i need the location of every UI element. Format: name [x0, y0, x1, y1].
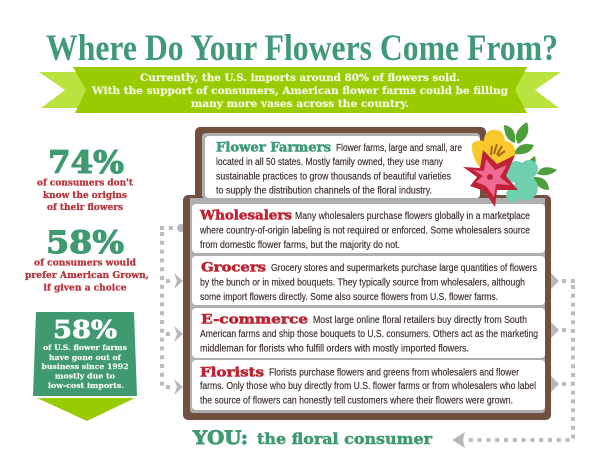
wholesalers text: where country-of-origin labeling is not required or enforced. Some wholesalers source: [199, 226, 530, 236]
panel: wholesalers: [190, 198, 545, 253]
flower farmers heading: Flower Farmers: [216, 140, 331, 156]
callout: 58 percent of farms gone: of U.S. flower farms: [43, 343, 128, 352]
florists text: Florists purchase flowers and greens from wholesalers and flower: [269, 368, 520, 378]
callout: 58 percent of farms gone: [33, 312, 137, 421]
stat: 58 percent would prefer American Grown: if given a choice: [44, 282, 126, 294]
grocers text: some import flowers directly. Some also source flowers from U.S. flower farms.: [200, 292, 498, 303]
florists text: [200, 368, 536, 406]
banner text: many more vases across the country.: [191, 99, 409, 110]
e-commerce text: American farms and ship those bouquets to U.S. consumers. Others act as the marketing: [200, 329, 538, 340]
yellow flower: [472, 130, 515, 168]
flower farmers text: sustainable practices to grow thousands of beautiful varieties: [216, 172, 451, 182]
icon: flower bouquet: [463, 122, 557, 207]
panel: e-commerce: [192, 308, 545, 358]
grocers heading: Grocers: [201, 260, 266, 276]
red lily: [463, 150, 518, 207]
grocers text: by the bunch or in mixed bouquets. They typically source from wholesalers, although: [200, 278, 525, 288]
wholesalers text: [199, 211, 530, 251]
stat: 74 percent: 74%: [48, 145, 124, 181]
left dotted connector with arrows: [160, 224, 185, 395]
stat: 74 percent: of consumers don't: [37, 178, 134, 188]
teal flower: [505, 160, 538, 202]
e-commerce text: Most large online floral retailers buy directly from South: [313, 315, 527, 326]
banner text: Currently, the U.S. imports around 80% of flowers sold.: [140, 73, 460, 84]
stat: 58 percent would prefer American Grown: 58%: [46, 225, 124, 261]
grocers text: Grocery stores and supermarkets purchase large quantities of flowers: [271, 263, 537, 274]
banner text: [91, 73, 508, 110]
florists heading: Florists: [200, 366, 264, 380]
stat: 58 percent would prefer American Grown: of consumers would: [34, 258, 136, 268]
wholesalers text: Many wholesalers purchase flowers globally in a marketplace: [295, 211, 530, 222]
stat: 74 percent: [37, 145, 134, 213]
callout: 58 percent of farms gone: mostly due to: [55, 372, 115, 380]
florists text: farms. Only those who buy directly from U.S. flower farms or from wholesalers who label: [200, 381, 536, 392]
flower farmers text: [216, 143, 462, 196]
you: the floral consumer: the floral consumer: [257, 430, 433, 448]
grocers text: [200, 263, 537, 303]
stat: 58 percent would prefer American Grown: [25, 225, 149, 294]
e-commerce heading: E-commerce: [201, 312, 308, 328]
banner ribbon: [39, 67, 561, 113]
wholesalers text: from domestic flower farms, but the majority do not.: [200, 240, 400, 251]
stat: 74 percent: of their flowers: [47, 202, 123, 213]
panel: florists: [192, 360, 545, 410]
banner text: With the support of consumers, American flower farms could be filling: [91, 86, 508, 97]
callout: 58 percent of farms gone: business since 1992: [42, 362, 128, 371]
e-commerce text: middleman for florists who fulfill orders with mostly imported flowers.: [200, 344, 469, 354]
panel: supply chain frame: [183, 195, 551, 420]
flower farmers text: Flower farms, large and small, are: [336, 143, 462, 154]
wholesalers heading: Wholesalers: [199, 208, 292, 224]
you: the floral consumer: [192, 427, 433, 449]
panel: grocers: [192, 256, 545, 305]
flower farmers text: located in all 50 states. Mostly family owned, they use many: [216, 157, 443, 168]
callout: 58 percent of farms gone: low-cost imports.: [48, 381, 124, 390]
stat: 74 percent: know the origins: [43, 190, 127, 201]
flower farmers text: to supply the distribution channels of the floral industry.: [216, 186, 432, 196]
stat: 58 percent would prefer American Grown: prefer American Grown,: [25, 270, 149, 281]
e-commerce text: [200, 315, 538, 354]
florists text: the source of flowers can honestly tell customers where their flowers were grown.: [200, 396, 513, 406]
leaves: [504, 122, 557, 190]
callout: 58 percent of farms gone: have gone out of: [49, 353, 122, 362]
you: the floral consumer: YOU:: [192, 427, 248, 449]
callout: 58 percent of farms gone: 58%: [53, 315, 117, 344]
right dotted connector with arrows: [452, 273, 575, 448]
panel: flower farmers: [195, 127, 486, 199]
